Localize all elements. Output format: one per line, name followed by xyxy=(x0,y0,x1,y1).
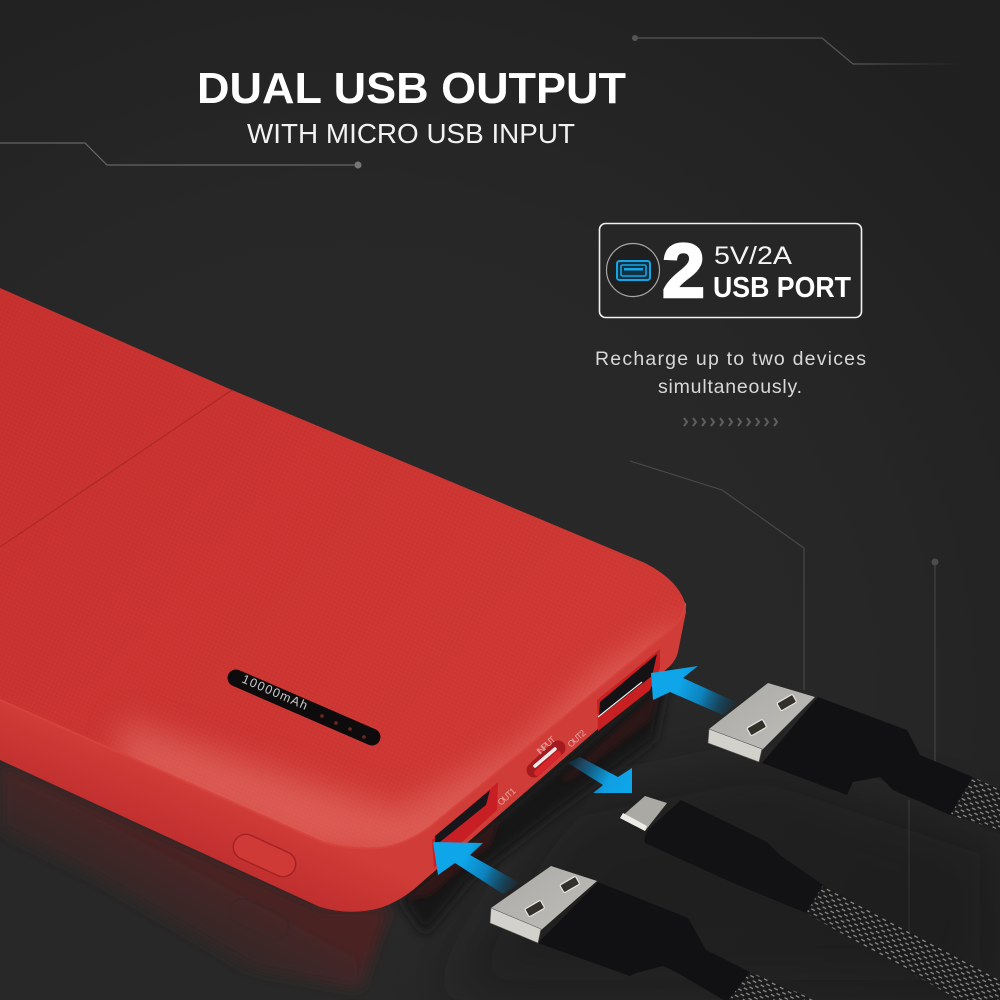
port labels: OUT1 xyxy=(496,786,518,807)
connector housing xyxy=(762,697,973,815)
metal plug xyxy=(709,683,815,750)
description text: Recharge up to two devices xyxy=(595,348,866,370)
LED indicator window xyxy=(236,672,372,739)
top face xyxy=(0,288,685,848)
icon: USB port xyxy=(606,244,660,296)
plug lip xyxy=(490,908,541,943)
face highlight xyxy=(0,288,690,860)
port micro USB input xyxy=(534,748,558,773)
badge label: USB PORT xyxy=(713,272,851,304)
badge number: 2 xyxy=(662,229,705,314)
badge: USB port xyxy=(600,224,862,318)
metal plug xyxy=(491,866,597,931)
port labels xyxy=(496,728,588,807)
port OUT2 xyxy=(597,649,660,731)
capacity label: 10000mAh xyxy=(240,672,310,713)
circuit line: far right xyxy=(909,558,938,935)
circuit line: right centre xyxy=(630,461,804,690)
plug lip xyxy=(708,729,762,762)
description text xyxy=(595,348,866,398)
arrow: into OUT1 xyxy=(433,842,520,894)
body side xyxy=(0,500,686,912)
power bank xyxy=(0,288,690,912)
chevrons xyxy=(684,418,777,426)
port labels: INPUT xyxy=(535,734,558,756)
micro USB cable xyxy=(620,796,1000,1000)
plug holes xyxy=(747,694,797,736)
cable shadows xyxy=(440,760,1000,1000)
arrow: from micro USB input xyxy=(568,757,632,793)
cable braid xyxy=(727,972,815,1000)
cable braid xyxy=(806,885,1000,1000)
power button xyxy=(246,847,283,864)
panel seam xyxy=(0,390,232,547)
port OUT1 xyxy=(432,782,498,868)
USB cable top xyxy=(708,683,1000,830)
plug holes xyxy=(525,876,580,917)
circuit line: top right xyxy=(632,35,965,64)
port labels: OUT2 xyxy=(566,728,588,749)
rim highlight xyxy=(0,603,685,848)
circuit line: left xyxy=(0,143,362,168)
metal plug xyxy=(620,796,667,831)
subtitle: WITH MICRO USB INPUT xyxy=(247,118,575,149)
connector housing xyxy=(538,882,750,1000)
cable braid xyxy=(950,777,1000,830)
connector housing xyxy=(645,800,823,913)
USB cable bottom xyxy=(490,866,815,1000)
description text: simultaneously. xyxy=(658,376,802,398)
badge voltage: 5V/2A xyxy=(714,242,792,270)
arrow: into OUT2 xyxy=(651,666,738,715)
title: DUAL USB OUTPUT xyxy=(197,64,626,113)
power bank reflection xyxy=(0,668,670,990)
